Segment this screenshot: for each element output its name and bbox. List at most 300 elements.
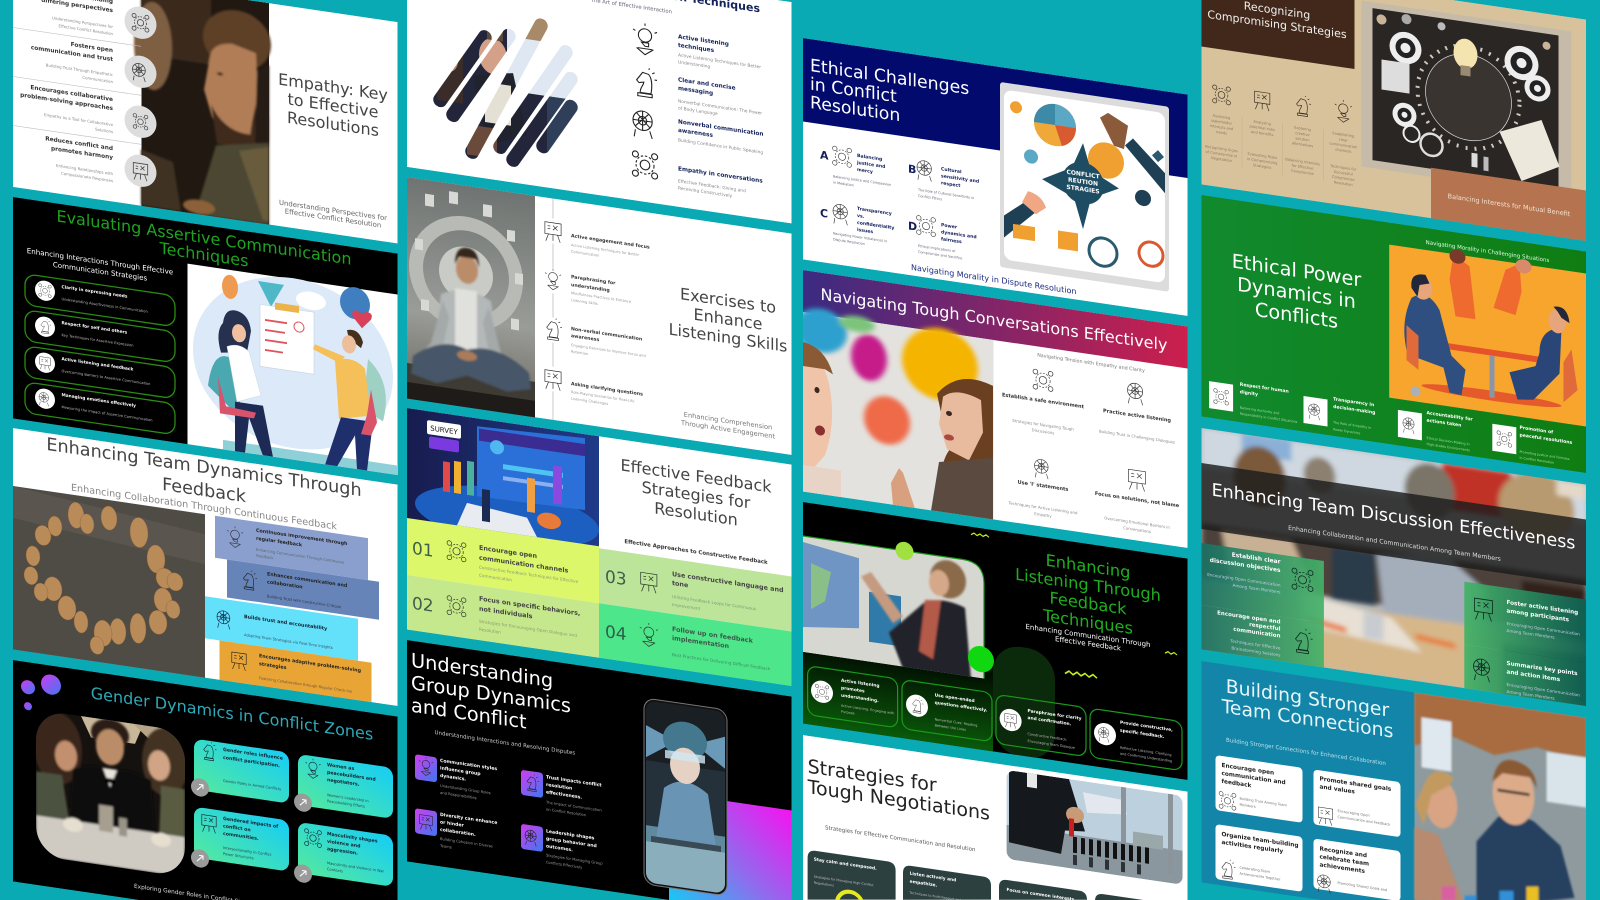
illustration: survey dashboard: SURVEY: [430, 423, 458, 437]
list text: Understanding Perspectives for: [52, 15, 113, 29]
item A: justice and: [856, 160, 885, 170]
feedback step 1: [215, 516, 368, 580]
column text: Recognizing Signs: [1205, 145, 1238, 153]
header band: [803, 38, 1188, 178]
item labels: Establish a safe environment: [1002, 392, 1085, 410]
panel 01: Communication: [479, 573, 512, 582]
cards: assertive techniques: Overcoming Barriers to Assertive Communication: [62, 369, 150, 386]
item D: Compromise and Sacrifice: [918, 250, 962, 260]
title: Ethical Challenges: [810, 56, 969, 99]
icon glyphs: [419, 756, 539, 847]
item text: Responsibility in Conflict Situations: [1240, 412, 1298, 424]
card text: Purpose: [841, 710, 855, 716]
item text: [1240, 382, 1572, 468]
item text: collaboration.: [440, 827, 476, 838]
item text: High-Stakes Environments: [1426, 442, 1470, 452]
title: Resolution: [654, 498, 738, 530]
subtitle: Enhancing Collaboration and Communication Among Team Members: [1288, 525, 1501, 563]
item C: issues: [857, 227, 873, 235]
card: organize team-building: [1216, 824, 1302, 892]
arrows: [197, 784, 306, 877]
title: Exercises to: [680, 284, 776, 317]
slide: Ethical power dynamics in conflicts: [1202, 195, 1586, 473]
item text: Respect for human: [1240, 383, 1289, 395]
subtitle: Navigating Tension with Empathy and Clarity: [1037, 352, 1145, 374]
item text: influence group: [440, 765, 481, 777]
column text: Strategies: [1253, 163, 1271, 170]
item text: Paraphrasing for: [571, 275, 615, 287]
card: promote shared goals: Communication and Feedback: [1338, 815, 1391, 827]
panel 04: 04: [605, 622, 627, 645]
panel 03: Improvement: [672, 602, 701, 611]
item B: Cultural: [941, 167, 962, 175]
title: Ethical Power: [1232, 250, 1361, 291]
dark title band: [1202, 463, 1586, 586]
cards: assertive techniques: Active listening and feedback: [62, 356, 133, 373]
item text: Active engagement and focus: [571, 233, 650, 251]
card text: [814, 857, 1076, 900]
item text: on Conflict Resolution: [546, 807, 587, 817]
item A: Balancing: [857, 154, 882, 163]
card text: Provide constructive,: [1120, 721, 1173, 733]
card: foster listening: [1464, 582, 1586, 663]
photo: meeting around a table: [1202, 424, 1586, 707]
item D: D: [908, 219, 917, 234]
item text: actions taken: [1426, 418, 1461, 429]
card: summarize: Summarize key points: [1506, 661, 1578, 677]
card: encourage open: respectful: [1249, 622, 1281, 633]
card: promote shared goals: and values: [1320, 784, 1355, 796]
list text: Compassionate Responses: [61, 171, 113, 183]
card text: Encouraging Team Dialogue: [1028, 739, 1075, 750]
squiggles: [971, 533, 1177, 690]
item C: Transparency: [857, 207, 892, 217]
list dividers: [13, 28, 141, 144]
green circle: [968, 644, 994, 674]
slide: Navigating tough conversations effectively: [795, 269, 1188, 549]
item text: peaceful resolutions: [1520, 432, 1572, 446]
feedback step 3: Adopting Team Strategies via Real-Time Insights: [244, 633, 333, 650]
card: gendered impacts: Power Structures: [223, 852, 254, 860]
item D: Power: [941, 223, 957, 231]
card: organize team-building: Achievements Together: [1240, 872, 1281, 882]
cards: [808, 666, 1182, 771]
item text: effectiveness.: [546, 789, 582, 801]
item text: Leadership shapes: [546, 829, 594, 842]
title: Group Dynamics: [411, 671, 571, 718]
card text: and Confirming Understanding: [1120, 752, 1172, 763]
panel 04: Follow up on feedback: [672, 625, 753, 645]
icons: [1033, 368, 1146, 494]
item text: Communication: [571, 250, 599, 258]
card: recognize achievements: achievements: [1320, 862, 1365, 875]
card: encourage open: Techniques for Effective: [1230, 638, 1280, 651]
item text: techniques: [678, 43, 715, 54]
photo: ring of wooden figures: [13, 486, 205, 678]
timeline icons: [543, 217, 563, 393]
title: to Effective: [288, 89, 379, 122]
cards: assertive techniques: Clarity in expressing needs: [62, 284, 128, 300]
card: peacebuilders: Women's Leadership in: [327, 793, 369, 803]
title: Building Stronger: [1226, 676, 1389, 722]
card text: Strategies for Managing High-Conflict: [814, 875, 874, 887]
item text: [571, 233, 650, 412]
photo: teacher at screen: [803, 536, 985, 681]
card text: specific feedback.: [1120, 728, 1165, 740]
column text: alternatives: [1292, 141, 1313, 148]
title: Listening Skills: [669, 320, 787, 356]
slide: Gender dynamics in conflict zones: [13, 660, 398, 900]
title: Gender Dynamics in Conflict Zones: [91, 684, 373, 744]
title: Strategies for: [808, 755, 937, 797]
footer caption: Navigating Morality in Dispute Resolution: [911, 263, 1076, 296]
slide: Enhancing team dynamics through feedback: [13, 428, 398, 707]
title: Enhancing Team Discussion Effectiveness: [1212, 481, 1575, 554]
item text: Clear and concise: [678, 77, 736, 92]
card: organize team-building: Celebrating Team: [1240, 866, 1270, 874]
phone with woman in helmet: [644, 698, 727, 897]
title: in Conflict: [810, 75, 897, 107]
subtitle: Effective Feedback: [1055, 634, 1122, 653]
column text: Negotiation: [1211, 156, 1232, 163]
item text: awareness: [571, 333, 599, 343]
panel 01: Encourage open: [479, 544, 537, 560]
item labels: Practice active listening: [1103, 408, 1171, 424]
card text: [841, 678, 1173, 764]
item descriptions: Conversations: [1123, 525, 1151, 534]
icon glyphs: [1214, 388, 1512, 448]
title: Conflicts: [1255, 298, 1338, 333]
subtitle: Through Active Engagement: [680, 419, 775, 441]
slide: Recognizing compromising strategies: [1202, 0, 1586, 242]
card: gendered impacts: communities.: [223, 831, 259, 842]
item descriptions: Overcoming Emotional Barriers in: [1104, 515, 1170, 530]
slide: Exercises to enhance listening skills: [407, 177, 792, 456]
card text: Use open-ended: [935, 693, 975, 704]
list text: Empathy as a Tool for Collaborative: [44, 112, 113, 127]
icon badges: [124, 4, 156, 189]
panel 04: implementation: [672, 634, 729, 650]
item text: Empathy in conversations: [678, 166, 763, 185]
card: recognize achievements: celebrate team: [1320, 854, 1369, 868]
title: Empathy: Key: [278, 70, 388, 105]
icon set: [132, 13, 149, 182]
item text: Receiving Constructively: [678, 185, 733, 199]
card: promote shared goals: Promote shared goals: [1320, 776, 1391, 793]
panel 03: Utilizing Feedback Loops for Continuous: [672, 594, 756, 611]
item text: Building Cohesion in Diverse: [440, 837, 493, 849]
card: encourage open: [1202, 605, 1324, 668]
column text: in Compromising: [1247, 157, 1277, 165]
item text: Strategies for Managing Group: [546, 853, 603, 866]
item text: Accountability for: [1426, 411, 1473, 423]
item text: decision-making: [1333, 404, 1375, 416]
card: establish objectives: discussion objectives: [1210, 557, 1281, 574]
card: encourage open communication: [1216, 755, 1302, 823]
cards: assertive techniques: Understanding Assertiveness in Communication: [62, 297, 148, 314]
subtitle: Enhancing Interactions Through Effective: [27, 246, 173, 277]
feedback step 4: strategies: [259, 661, 287, 671]
panel 03: tone: [672, 579, 689, 589]
card: masculinity: violence and: [327, 839, 361, 850]
card: encourage open communication: communication and: [1222, 771, 1286, 786]
card: peacebuilders: Women as: [327, 763, 354, 772]
footer caption: Balancing Interests for Mutual Benefit: [1448, 192, 1571, 218]
column text: potential risks: [1249, 124, 1275, 132]
cards: assertive techniques: [25, 274, 175, 435]
card text: Negotiations: [814, 881, 834, 888]
card text: Active Listening: Engaging with: [841, 704, 894, 715]
card: establish objectives: Establish clear: [1232, 551, 1280, 566]
item text: Asking clarifying questions: [571, 381, 643, 398]
item B: B: [908, 162, 916, 177]
title: Effective Feedback: [620, 455, 772, 497]
column text: communication: [1329, 141, 1357, 149]
item text: Non-verbal communication: [571, 327, 642, 343]
slide: Evaluating assertive communication techniques: [13, 197, 398, 476]
item text: resolution: [546, 782, 572, 792]
card: peacebuilders: [298, 754, 393, 819]
item labels: Focus on solutions, not blame: [1095, 491, 1180, 509]
item text: understanding: [571, 282, 610, 294]
card: foster listening: Foster active listening: [1506, 600, 1578, 616]
photo: two men talking: [134, 0, 271, 225]
item descriptions: Empathy: [1034, 511, 1052, 519]
column text: clear: [1339, 138, 1348, 143]
title: Techniques: [159, 238, 248, 271]
panel 02: Focus on specific behaviors,: [479, 595, 580, 617]
item text: group behavior and: [546, 836, 597, 849]
card: recognize achievements: Promoting Shared Goals and: [1338, 881, 1387, 892]
card: summarize: Among Team Members: [1506, 689, 1555, 701]
card: summarize: and action items: [1506, 669, 1561, 683]
item text: Nonverbal Communication: The Power: [678, 99, 762, 117]
card: foster listening: Among Team Members: [1506, 628, 1555, 640]
card: masculinity: Contexts: [327, 867, 343, 874]
item descriptions: Discussions: [1032, 427, 1054, 435]
item A: [820, 144, 891, 193]
title: Enhance: [694, 305, 763, 334]
title: Resolution: [810, 93, 900, 126]
item text: Teams: [439, 844, 452, 850]
card: establish objectives: [1202, 543, 1324, 623]
column text: Assessing: [1213, 114, 1230, 120]
card: gendered impacts: Gendered impacts of: [223, 817, 278, 830]
column text: Evaluating Risks: [1247, 152, 1277, 160]
card: foster listening: among participants: [1506, 608, 1570, 624]
card text: Between the Lines: [935, 723, 966, 732]
item B: sensitivity and: [941, 173, 979, 185]
list text: Reduces conflict and: [45, 136, 113, 152]
title: Enhancing Team Dynamics Through: [46, 435, 362, 501]
subtitle: Enhancing Comprehension: [684, 411, 772, 432]
panel 01: 01: [412, 539, 434, 562]
card icon ring: [837, 890, 862, 900]
feedback step 3: Builds trust and accountability: [244, 614, 328, 632]
title: Techniques: [1042, 606, 1133, 638]
panel 04: Best Practices for Delivering Difficult Feedback: [672, 652, 771, 671]
title: Navigating Tough Conversations Effectively: [821, 285, 1168, 355]
item A: A: [820, 149, 829, 163]
card text: Listen actively and: [910, 872, 956, 884]
item C: vs.: [857, 214, 865, 220]
decorative bubbles: [21, 674, 61, 710]
item A: in Mediation: [833, 180, 854, 187]
header block: [1202, 0, 1354, 69]
subtitle: Enhancing Communication Through: [1026, 622, 1150, 649]
item text: The Role of Empathy in: [1333, 420, 1371, 430]
photo: team collaborating: [1414, 692, 1586, 900]
feedback step 2: collaboration: [267, 579, 303, 591]
slide: Ethical challenges in conflict resolution: [803, 38, 1188, 316]
dark green glow: [803, 632, 993, 752]
item labels: Use 'I' statements: [1018, 480, 1068, 493]
slide: Enhancing listening through feedback techniques: [803, 502, 1188, 782]
illustration: conflict resolution strategies: [1000, 82, 1169, 292]
panel 04: [599, 603, 792, 687]
list text: [20, 0, 114, 183]
item text: awareness: [678, 128, 713, 139]
feedback step 1: regular feedback: [256, 536, 303, 549]
item text: Understanding Group Roles: [440, 784, 491, 795]
title: Feedback: [162, 475, 247, 507]
slide: Active communication techniques: [407, 0, 792, 224]
item C: Navigating Power Imbalances in: [833, 231, 887, 243]
card text: Active listening: [841, 679, 880, 689]
item text: Diversity can enhance: [440, 813, 497, 826]
card: establish objectives: Among Team Members: [1232, 583, 1280, 595]
card text: Constructive Feedback:: [1028, 732, 1067, 742]
cards: assertive techniques: Measuring the Impact of Assertive Communication: [62, 405, 153, 423]
photo: meditating man: [407, 177, 535, 418]
item B: Conflict Ethics: [918, 194, 942, 201]
item text: Building Confidence in Public Speaking: [678, 137, 763, 156]
item text: Understanding: [678, 59, 710, 70]
column text: Exploring: [1294, 126, 1311, 132]
item text: Promotion of: [1520, 426, 1553, 436]
item text: [678, 34, 764, 204]
column text: Establishing: [1332, 131, 1354, 138]
column text: creative: [1295, 131, 1311, 137]
item labels: [1002, 392, 1180, 509]
item text: dynamics.: [440, 773, 466, 783]
card text: and confirmation.: [1028, 715, 1072, 727]
panel 02: Resolution: [479, 627, 501, 635]
item text: Conflicts Effectively: [546, 860, 583, 870]
card: masculinity: Masculinity and Violence in War: [327, 861, 384, 874]
title: Feedback: [1049, 588, 1127, 619]
panel 02: Strategies for Encouraging Open Dialogue and: [479, 619, 577, 638]
feedback step 3: [205, 596, 358, 661]
list text: Encourages collaborative: [30, 85, 113, 103]
column text: Techniques for: [1330, 164, 1356, 172]
item text: Mindfulness Practices to Enhance: [571, 291, 631, 304]
card: encourage open: Brainstorming Sessions: [1231, 645, 1281, 658]
illustration: business meeting: [1389, 240, 1586, 427]
item text: [439, 758, 603, 873]
card: masculinity: Masculinity shapes: [327, 832, 378, 845]
negotiation cards: [808, 850, 1188, 900]
card: organize team-building: Organize team-building: [1222, 832, 1299, 849]
item C: Dispute Resolution: [833, 237, 865, 246]
column text: Successful: [1334, 170, 1353, 177]
panel 02: not individuals: [479, 605, 533, 620]
item text: Role-Playing Scenarios for Real-Life: [571, 390, 634, 403]
card: masculinity: [298, 822, 393, 887]
card: gender roles: conflict participation.: [223, 755, 280, 769]
subtitle: Enhancing Collaboration Through Continuous Feedback: [71, 483, 337, 533]
card: gendered impacts: [194, 807, 289, 872]
item text: Promoting Justice and Fairness: [1520, 450, 1570, 461]
column text: solution: [1295, 136, 1310, 142]
title: Resolutions: [287, 108, 379, 140]
card: establish objectives: Encouraging Open Communication: [1207, 572, 1280, 588]
card: foster listening: Encouraging Open Communication: [1506, 621, 1580, 637]
feedback step 1: Continuous improvement through: [256, 529, 347, 547]
gradient block: [669, 793, 792, 900]
item text: Power Dynamics: [1333, 427, 1361, 435]
item text: or hinder: [440, 819, 464, 829]
item D: Ethical Implications of: [918, 244, 955, 253]
list text: promotes harmony: [51, 146, 113, 161]
column text: Analyzing: [1253, 120, 1271, 126]
title: Enhancing: [1046, 551, 1130, 582]
column separators: [1242, 117, 1324, 181]
cards: assertive techniques: Key Techniques for Assertive Expression: [62, 333, 134, 348]
item text: Listening Skills: [571, 298, 598, 306]
gradient header: [803, 270, 1188, 369]
timeline rail: [552, 198, 554, 420]
card: peacebuilders: Peacebuilding Efforts: [327, 799, 365, 809]
title: Listening Through: [1015, 565, 1161, 605]
column text: for Effective: [1292, 164, 1314, 171]
card: encourage open: communication: [1233, 627, 1281, 640]
item text: Balancing Authority and: [1240, 406, 1279, 415]
feedback step 4: Encourages adaptive problem-solving: [259, 654, 361, 674]
item text: Retention: [571, 350, 588, 356]
column text: needs: [1216, 130, 1227, 136]
item A: Balancing Justice and Compassion: [833, 174, 891, 187]
card text: Nonverbal Cues: Reading: [935, 717, 977, 728]
list text: communication and trust: [31, 45, 113, 63]
item text: Active Listening Techniques for Better: [678, 53, 761, 71]
card: peacebuilders: negotiators.: [327, 777, 360, 788]
slide: Empathy key to effective resolutions: [13, 0, 398, 244]
feedback step 2: Enhances communication and: [267, 572, 347, 589]
item text: outcomes.: [546, 843, 573, 853]
column text: interests and: [1210, 124, 1233, 131]
slide: Strategies for tough negotiations: [803, 735, 1188, 900]
feedback step 1: Enhancing Communication Through Continuous: [256, 548, 344, 565]
subtitle: Building Stronger Connections for Enhanced Collaboration: [1226, 738, 1386, 767]
list text: Fosters open: [71, 42, 113, 54]
card text: promotes: [841, 685, 865, 695]
title: Strategies for: [642, 478, 751, 513]
card: gender roles: [194, 739, 289, 804]
list text: Solutions: [95, 127, 113, 134]
card: peacebuilders: peacebuilders and: [327, 770, 376, 783]
card: encourage open communication: Building Trust Among Team: [1240, 797, 1287, 808]
list text: problem-solving approaches: [20, 93, 114, 112]
item descriptions: Strategies for Navigating Tough: [1012, 418, 1074, 432]
card: recognize achievements: [1314, 838, 1400, 900]
item text: Engaging Exercises to Improve Focus and: [571, 343, 646, 358]
icon tiles: [1209, 381, 1516, 454]
photo cut into diagonal capsules: [433, 18, 578, 167]
item text: The Impact of Communication: [546, 800, 602, 813]
slide: Understanding group dynamics and conflict: [407, 640, 792, 900]
illustration: conflict resolution strategies: STRAGIES: [1066, 184, 1100, 196]
